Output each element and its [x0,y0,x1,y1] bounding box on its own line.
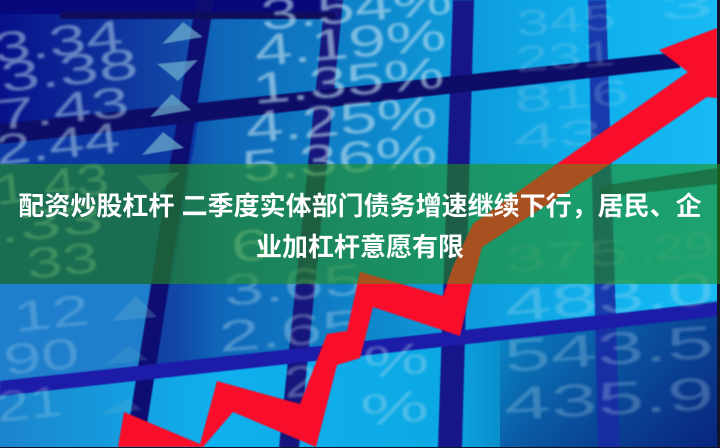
arrow seen through the title band [357,164,610,284]
ticker numbers: 345 [515,0,617,44]
ticker numbers: 4.25% [244,87,439,153]
ticker numbers: 2.65 [217,301,365,362]
ticker numbers: % [359,381,431,436]
ticker numbers: 33 [24,234,101,289]
ticker numbers: 4.19% [253,10,448,76]
ticker numbers: 12 [11,286,92,342]
ticker numbers: 3.38 [0,40,140,102]
ticker numbers: 43 [512,111,604,158]
ticker numbers: 375 [503,230,630,280]
ticker numbers: 1.35% [251,48,446,114]
red rising arrow [118,28,717,447]
ticker numbers: 2 [282,356,321,408]
ticker numbers: 5.36% [240,126,439,192]
ticker numbers: 543.5 [502,315,715,382]
title: 配资炒股杠杆 二季度实体部门债务增速继续下行，居民、企业加杠杆意愿有限 [18,191,702,262]
ticker numbers: 435.9 [503,367,715,430]
ticker numbers: 6 [229,220,273,272]
ticker triangles [100,22,203,415]
ticker numbers: % [362,333,431,388]
ticker numbers: 816 [513,71,630,120]
title band [0,164,720,284]
ticker numbers: 483.0 [502,262,716,332]
ticker numbers: 90 [1,329,82,385]
ticker numbers: 3.65 [222,255,365,316]
ticker numbers: 231 [514,32,616,80]
ticker numbers: .29 [638,224,715,270]
